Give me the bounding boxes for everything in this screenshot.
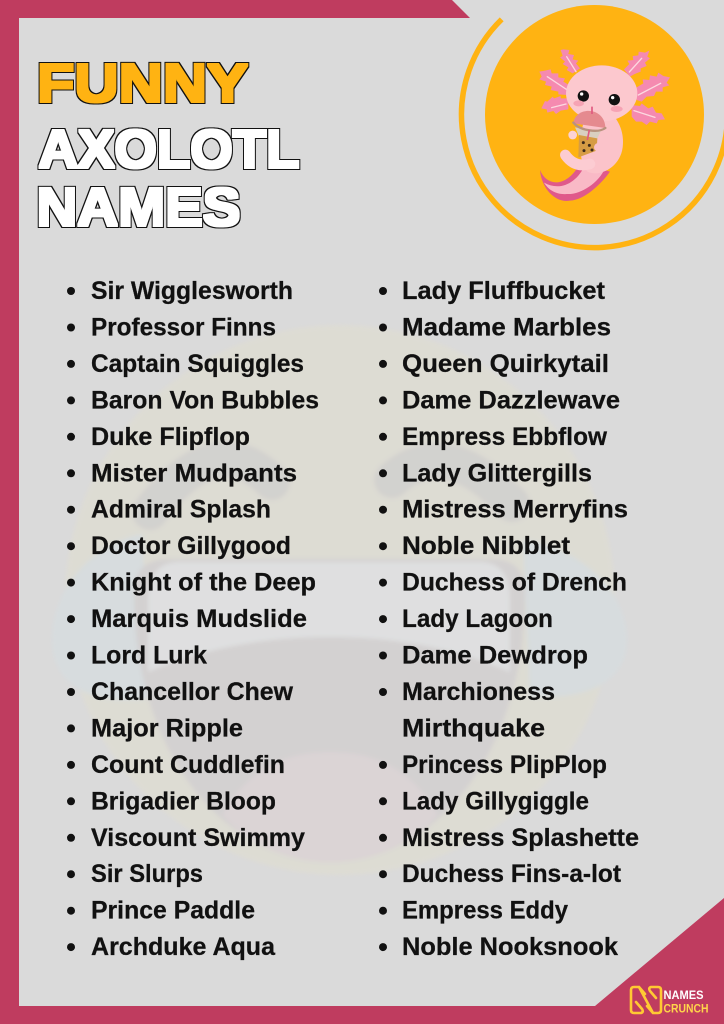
names list: right column: Mistress Splashette [402, 824, 639, 852]
names list: left column [67, 277, 319, 961]
names list: left column: Baron Von Bubbles [91, 386, 319, 414]
bottom border bar [0, 1006, 724, 1024]
names list: right column: Lady Fluffbucket [402, 277, 606, 305]
body [580, 117, 623, 173]
names list: right column: Duchess Fins-a-lot [402, 860, 622, 888]
names list: left column: Prince Paddle [91, 897, 255, 925]
names list: left column: Doctor Gillygood [91, 532, 291, 560]
logo: names crunch [631, 987, 708, 1016]
cheeks [573, 100, 584, 106]
names list: left column: Sir Slurps [91, 860, 203, 888]
names list: right column: Empress Eddy [402, 897, 568, 925]
names list: right column: Lady Gillygiggle [402, 787, 589, 815]
decorative arc ring [462, 19, 724, 248]
names list: left column: Duke Flipflop [91, 423, 250, 451]
names list: right column: Queen Quirkytail [402, 350, 609, 378]
names list: left column: Captain Squiggles [91, 350, 304, 378]
hand [568, 131, 577, 139]
names list: left column: Admiral Splash [91, 496, 271, 524]
names list: right column: Madame Marbles [402, 314, 611, 342]
logo wordmark: NAMES [664, 988, 704, 1002]
title [36, 54, 300, 238]
bottom right corner triangle [590, 898, 724, 1024]
names list: right column: Princess PlipPlop [402, 751, 607, 779]
names list: right column: Noble Nooksnook [402, 933, 618, 961]
names list: right column: Mistress Merryfins [402, 496, 628, 524]
names list: left column: Marquis Mudslide [91, 605, 307, 633]
tail [540, 163, 610, 201]
top triangle banner [0, 0, 470, 18]
orange circle [485, 5, 704, 224]
gill veins [547, 57, 661, 117]
names list: right column: Mirthquake [402, 714, 545, 742]
names list: left column: Lord Lurk [91, 642, 207, 670]
icon: axolotl with bubble tea [539, 49, 670, 201]
bubble tea cup [573, 107, 605, 157]
left border bar [0, 0, 19, 1024]
names list: left column: Archduke Aqua [91, 933, 276, 961]
names list: left column: Major Ripple [91, 714, 243, 742]
eyes [578, 90, 589, 102]
names list: left column: Viscount Swimmy [91, 824, 305, 852]
names list: left column: Knight of the Deep [91, 569, 316, 597]
names list: right column: Lady Glittergills [402, 459, 592, 487]
names list: right column: Dame Dewdrop [402, 642, 588, 670]
names list: left column: Chancellor Chew [91, 678, 294, 706]
leg [565, 155, 590, 165]
names list: right column: Noble Nibblet [402, 532, 571, 560]
names list: left column: Mister Mudpants [91, 459, 297, 487]
names list: left column: Brigadier Bloop [91, 787, 276, 815]
names list: right column: Marchioness [402, 678, 555, 706]
head [566, 65, 637, 121]
arm [598, 139, 617, 148]
gills [539, 49, 670, 125]
title line: funny: FUNNY [37, 54, 248, 114]
title line: axolotl: AXOLOTL [38, 120, 300, 180]
watermark: faded laughing emoji [52, 325, 627, 875]
names list: right column [379, 277, 639, 961]
icon: logo N mark [631, 987, 661, 1013]
title line: names: NAMES [36, 178, 240, 238]
names list: left column: Sir Wigglesworth [91, 277, 293, 305]
names list: right column: Lady Lagoon [402, 605, 553, 633]
names list: right column: Empress Ebbflow [402, 423, 608, 451]
names list: right column: Dame Dazzlewave [402, 386, 620, 414]
names list: right column: Duchess of Drench [402, 569, 627, 597]
logo: names crunch: CRUNCH [664, 1002, 708, 1016]
names list: left column: Count Cuddlefin [91, 751, 285, 779]
names list: left column: Professor Finns [91, 314, 276, 342]
